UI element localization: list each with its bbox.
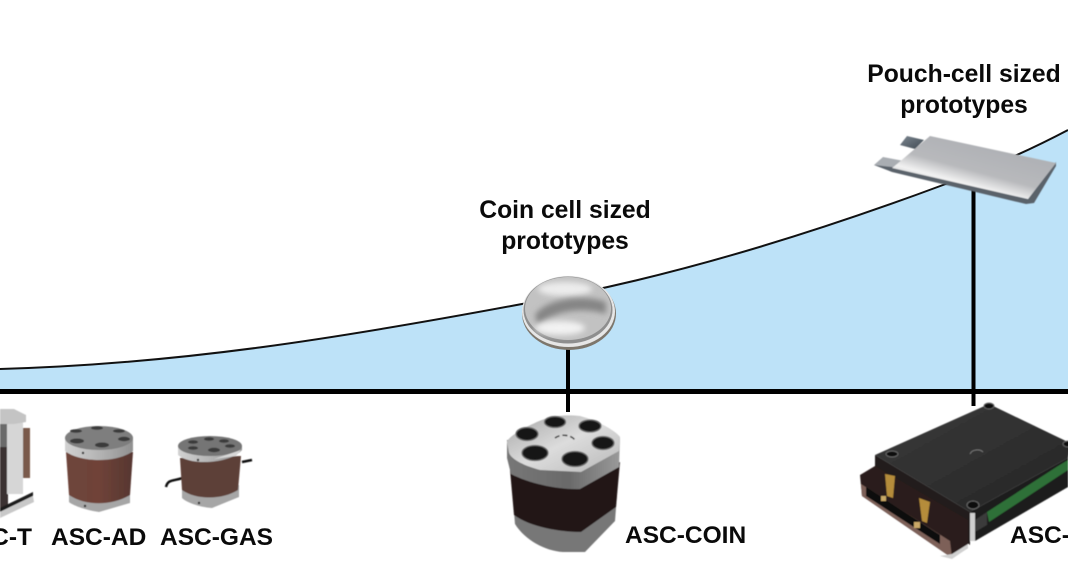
device top face: [178, 436, 242, 456]
pouch body: [892, 136, 1056, 199]
device top cover: [875, 404, 1068, 512]
label: ASC-COIN: ASC-COIN: [625, 522, 746, 549]
heading: coin cell sized prototypes: Coin cell sized: [479, 197, 651, 224]
device terminal strip: [987, 460, 1068, 522]
label: ASC-AD: ASC-AD: [51, 524, 146, 551]
gas cables: [166, 460, 252, 487]
heading: pouch-cell sized prototypes: [867, 61, 1061, 119]
device top face: [507, 415, 620, 472]
icon: coin cell: [522, 276, 616, 350]
horizontal axis: [0, 389, 1068, 394]
device gold contacts: [885, 474, 895, 498]
device upper steel: [507, 437, 620, 489]
device: ASC-AD: [65, 426, 133, 512]
label: ASC-GAS: ASC-GAS: [160, 524, 273, 551]
device bottom collar: [69, 490, 130, 512]
connector: coin cell to ASC-COIN: [566, 345, 570, 412]
device top collar: [178, 446, 242, 462]
device body: [180, 456, 241, 498]
device screw holes: [886, 403, 1068, 509]
device: ASC-T: [0, 409, 34, 518]
icon: pouch cell: [874, 136, 1056, 204]
area under growth curve: [0, 130, 1068, 389]
heading: pouch-cell sized prototypes: prototypes: [900, 92, 1028, 119]
heading: coin cell sized prototypes: prototypes: [501, 228, 629, 255]
device top collar: [65, 438, 133, 460]
growth curve line: [0, 130, 1068, 369]
device: ASC-LIB: [860, 403, 1068, 559]
device front tray: [860, 466, 968, 558]
device bottom collar: [182, 485, 239, 508]
device lower steel: [513, 495, 617, 552]
device rear plate: [875, 455, 970, 545]
device side panel: [970, 458, 1068, 541]
connector: pouch cell to ASC-LIB: [972, 190, 976, 406]
heading: coin cell sized prototypes: [479, 197, 651, 255]
pouch edge: [874, 162, 1056, 204]
device dark body: [510, 462, 620, 532]
pouch tab front: [874, 157, 904, 171]
device: ASC-COIN: [507, 415, 620, 552]
device top face: [65, 426, 133, 450]
device: ASC-GAS: [166, 436, 252, 508]
device body: [66, 452, 133, 503]
pouch tab rear: [900, 136, 924, 149]
heading: pouch-cell sized prototypes: Pouch-cell sized: [867, 61, 1061, 88]
device bolt holes: [516, 416, 614, 466]
